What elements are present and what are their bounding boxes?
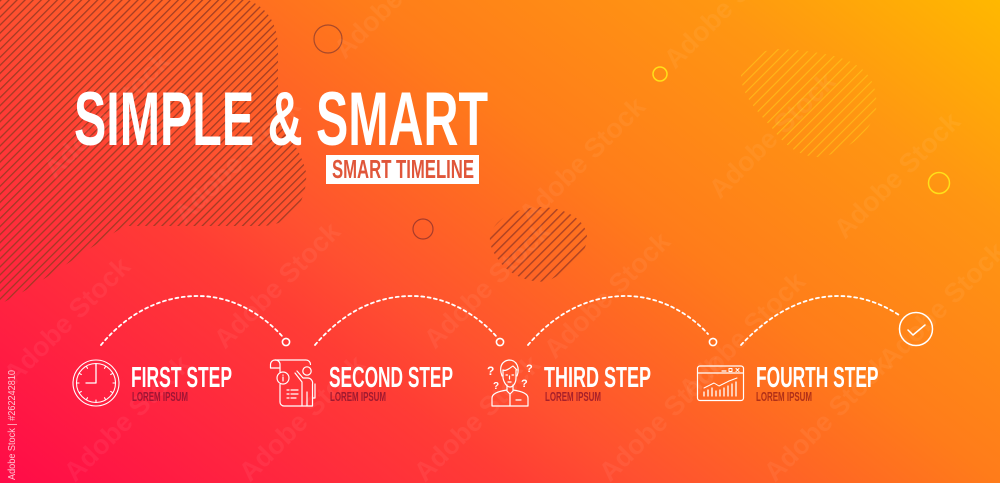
step 4 label: LOREM IPSUM [756,390,812,404]
watermarks: Adobe Stock [168,91,307,229]
icon: confused man with question marks: ? [487,364,494,378]
step 1 label [131,362,232,404]
step 3 label: THIRD STEP [544,362,651,394]
icon: final check mark [900,312,932,346]
watermarks: Adobe Stock [0,251,137,389]
icon: browser window with chart [698,366,744,400]
step 1 label: FIRST STEP [131,362,232,394]
watermarks: Adobe Stock [538,226,677,364]
step 2 label: SECOND STEP [329,362,453,394]
icon: confused man with question marks [487,360,533,406]
dashed timeline arcs [101,296,899,345]
watermarks: Adobe Stock [828,106,967,244]
yellow striped blob [741,49,876,157]
stock id vertical text: Adobe Stock | #262242810 [7,370,18,480]
step 2 label: LOREM IPSUM [330,390,386,404]
step 4 label [756,362,878,404]
icon: presenter with document [270,360,315,406]
watermarks: Adobe Stock [418,216,557,354]
title: SIMPLE & SMART [74,77,488,162]
watermarks: Adobe Stock [703,66,842,204]
watermarks: Adobe Stock [208,216,347,354]
decorative circles [314,25,950,239]
step 3 label [544,362,651,404]
small dark striped blob [490,207,587,282]
subtitle badge: SMART TIMELINE [332,156,474,184]
icon: confused man with question marks: ? [526,363,533,375]
icon: clock [73,360,119,406]
icon: confused man with question marks: ? [493,381,499,392]
step 3 label: LOREM IPSUM [545,390,601,404]
large striped blob top left [0,0,306,304]
watermarks: Adobe Stock [513,91,652,229]
step 1 label: LOREM IPSUM [132,390,188,404]
step 2 label [329,362,453,404]
subtitle badge [326,155,479,184]
timeline node markers [282,338,717,346]
step 4 label: FOURTH STEP [756,362,878,394]
watermarks: Adobe Stock [38,46,177,184]
watermarks: Adobe Stock [673,266,812,404]
icon: confused man with question marks: ? [521,378,528,390]
